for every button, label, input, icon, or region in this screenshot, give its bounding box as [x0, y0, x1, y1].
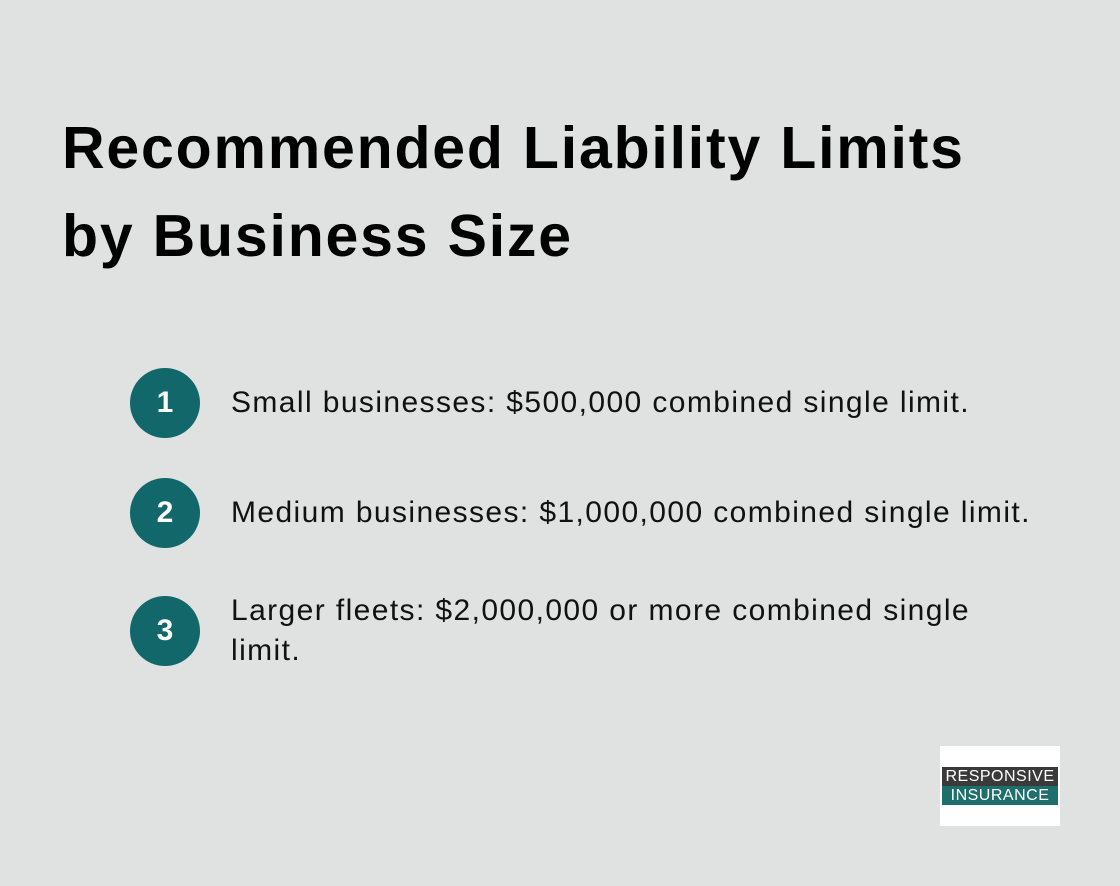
item 1: [130, 368, 970, 438]
circle 3: [130, 596, 200, 666]
text 2: Medium businesses: $1,000,000 combined single limit.: [231, 496, 1031, 529]
circle 3: 3: [157, 614, 173, 647]
circle 2: 2: [157, 496, 173, 529]
circle 2: [130, 478, 200, 548]
item 3: [130, 594, 970, 667]
title: Recommended Liability Limits: [62, 115, 965, 181]
logo: [940, 746, 1060, 826]
circle 1: 1: [157, 386, 173, 419]
title: [62, 115, 965, 269]
logo: RESPONSIVE: [945, 768, 1055, 785]
logo: INSURANCE: [951, 787, 1049, 804]
circle 1: [130, 368, 200, 438]
title: by Business Size: [62, 203, 573, 269]
text 1: Small businesses: $500,000 combined single limit.: [231, 386, 970, 419]
text 3: Larger fleets: $2,000,000 or more combined single limit.: [231, 594, 970, 667]
item 2: [130, 478, 1031, 548]
